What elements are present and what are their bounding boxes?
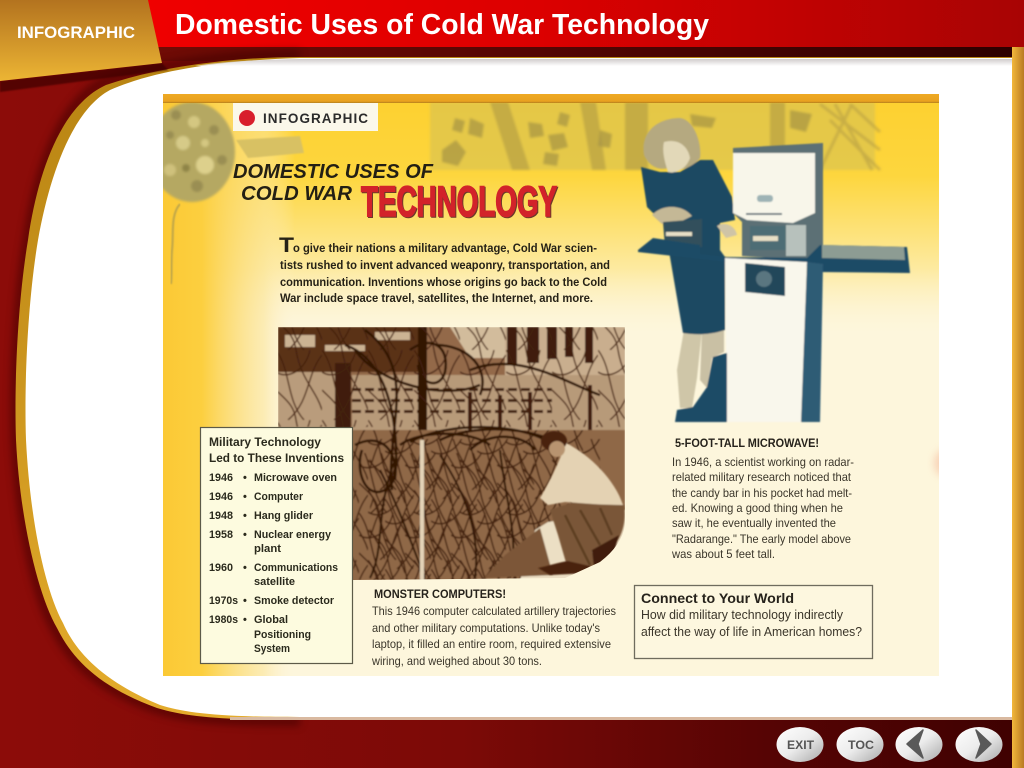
tab shadow bbox=[0, 63, 168, 92]
section tab bbox=[0, 0, 162, 81]
technician figure bbox=[538, 431, 625, 575]
caption: monster computers: wiring, and weighed about 30 tons. bbox=[371, 654, 542, 668]
timeline rows: satellite bbox=[254, 576, 295, 588]
caption: monster computers: This 1946 computer calculated artillery trajectories bbox=[372, 604, 616, 618]
infographic heading bbox=[233, 164, 558, 218]
timeline rows: 1958 bbox=[209, 529, 233, 541]
callout: connect to your world: affect the way of life in American homes? bbox=[641, 625, 862, 639]
timeline rows: Communications bbox=[254, 562, 338, 574]
decorative book bbox=[236, 136, 304, 158]
caption: 5-foot-tall microwave: was about 5 feet tall. bbox=[671, 547, 775, 561]
top orange bar bbox=[163, 94, 939, 103]
microwave cabinet bbox=[638, 143, 910, 422]
caption: monster computers: MONSTER COMPUTERS! bbox=[374, 587, 506, 601]
caption: 5-foot-tall microwave: ed. Knowing a good thing when he bbox=[672, 501, 843, 515]
timeline rows: • bbox=[243, 491, 247, 503]
timeline rows: plant bbox=[254, 543, 281, 555]
floor shadow bbox=[675, 353, 727, 422]
control panel bbox=[745, 263, 785, 296]
infographic heading: COLD WAR bbox=[241, 183, 353, 205]
caption: 5-foot-tall microwave: saw it, he eventually invented the bbox=[672, 516, 836, 530]
infographic heading: TECHNOLOGY bbox=[361, 178, 557, 226]
button: table of contents bbox=[836, 727, 884, 762]
infographic label bbox=[233, 103, 378, 131]
infographic panel bbox=[149, 94, 958, 676]
button: next arrow bbox=[956, 727, 1002, 762]
timeline box: military technology: Military Technology bbox=[209, 435, 321, 449]
button: table of contents: TOC bbox=[848, 738, 874, 752]
timeline rows: • bbox=[243, 614, 247, 626]
counter bbox=[638, 238, 910, 273]
cabinet base bbox=[725, 258, 807, 422]
caption: monster computers bbox=[371, 587, 616, 668]
red dot icon bbox=[239, 110, 255, 126]
infographic heading: DOMESTIC USES OF bbox=[233, 161, 434, 183]
timeline rows: 1946 bbox=[209, 491, 233, 503]
timeline rows: Nuclear energy bbox=[254, 529, 332, 541]
intro paragraph: communication. Inventions whose origins go back to the Cold bbox=[280, 276, 607, 289]
timeline box: military technology: Led to These Inventions bbox=[209, 451, 344, 465]
timeline rows: • bbox=[243, 529, 247, 541]
timeline rows: 1948 bbox=[209, 510, 233, 522]
caption: 5-foot-tall microwave: 5-FOOT-TALL MICROWAVE! bbox=[675, 436, 819, 450]
timeline rows: 1970s bbox=[209, 595, 238, 607]
timeline rows: Positioning bbox=[254, 629, 311, 641]
tab label: INFOGRAPHIC bbox=[17, 24, 135, 42]
balloon illustration bbox=[163, 103, 236, 204]
caption: 5-foot-tall microwave: the candy bar in his pocket had melt- bbox=[672, 486, 852, 500]
intro paragraph bbox=[279, 234, 610, 305]
intro paragraph: War include space travel, satellites, the Internet, and more. bbox=[280, 292, 593, 305]
intro paragraph: o give their nations a military advantage, Cold War scien- bbox=[293, 242, 597, 255]
button: previous arrow bbox=[896, 727, 942, 762]
timeline rows: 1980s bbox=[209, 614, 238, 626]
header bar bbox=[0, 0, 1024, 61]
faint pink mark bbox=[932, 448, 939, 477]
caption: 5-foot-tall microwave: related military research noticed that bbox=[672, 470, 852, 484]
balloon string bbox=[171, 204, 180, 284]
timeline rows: • bbox=[243, 472, 247, 484]
caption: monster computers: and other military computations. Unlike today's bbox=[372, 621, 600, 635]
infographic label: INFOGRAPHIC bbox=[263, 111, 368, 126]
caption: 5-foot-tall microwave: "Radarange." The early model above bbox=[672, 532, 851, 546]
timeline rows: Computer bbox=[254, 491, 304, 503]
timeline rows: • bbox=[243, 510, 247, 522]
caption: monster computers: laptop, it filled an entire room, required extensive bbox=[372, 637, 611, 651]
timeline rows: Microwave oven bbox=[254, 472, 337, 484]
timeline rows: Global bbox=[254, 614, 288, 626]
intro paragraph: tists rushed to invent advanced weaponry, transportation, and bbox=[280, 259, 610, 272]
timeline rows: 1960 bbox=[209, 562, 233, 574]
computer room photo bbox=[278, 327, 625, 603]
callout: connect to your world bbox=[634, 586, 872, 658]
photo: woman with early microwave bbox=[638, 118, 910, 422]
button: exit bbox=[776, 727, 824, 762]
right gold stripe bbox=[1012, 47, 1024, 768]
timeline rows: Hang glider bbox=[254, 510, 314, 522]
decorative faded map band bbox=[430, 102, 880, 170]
timeline rows bbox=[209, 472, 338, 655]
callout: connect to your world: How did military technology indirectly bbox=[641, 608, 844, 622]
button: exit: EXIT bbox=[787, 738, 815, 752]
timeline rows: • bbox=[243, 595, 247, 607]
callout: connect to your world: Connect to Your World bbox=[641, 590, 794, 606]
timeline rows: System bbox=[254, 643, 290, 655]
intro paragraph: T bbox=[279, 234, 294, 257]
infographic heading: TECHNOLOGY bbox=[362, 179, 558, 227]
timeline rows: • bbox=[243, 562, 247, 574]
timeline rows: 1946 bbox=[209, 472, 233, 484]
slide title: Domestic Uses of Cold War Technology bbox=[175, 9, 709, 41]
timeline rows: Smoke detector bbox=[254, 595, 335, 607]
caption: 5-foot-tall microwave: In 1946, a scientist working on radar- bbox=[672, 455, 854, 469]
caption: 5-foot-tall microwave bbox=[671, 436, 854, 561]
timeline box: military technology bbox=[200, 428, 352, 664]
woman bbox=[641, 118, 737, 408]
